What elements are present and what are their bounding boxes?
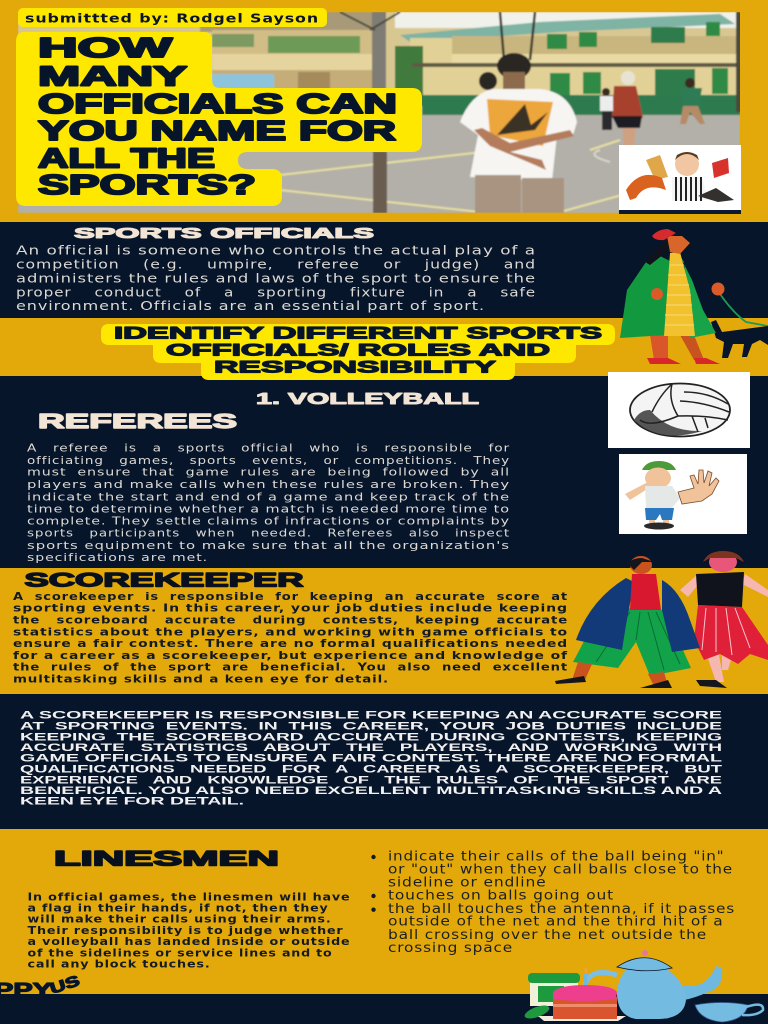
teapot handle <box>585 973 617 985</box>
icon: two fashion figures <box>555 551 768 688</box>
submitted-by label <box>18 8 327 27</box>
text block: uppercase description: ACCURATE STATISTICS ABOUT THE PLAYERS, AND WORKING WITH <box>20 742 722 754</box>
text block: referee description: players and make calls when these rules are broken. They <box>27 478 510 491</box>
text block: linesmen description: Their responsibility is to judge whether <box>28 924 343 937</box>
bullet list: when linesmen signal: touches on balls going out <box>388 889 614 904</box>
text block: linesmen description: a flag in their hands, if not, then they <box>28 901 328 914</box>
hair <box>645 237 671 265</box>
title on yellow block: ALL THE <box>38 142 215 174</box>
text block: definition of an official <box>16 244 536 313</box>
red shirt <box>630 574 661 610</box>
panel: linesmen <box>0 829 768 994</box>
title on yellow block: MANY <box>38 60 187 92</box>
text block: uppercase description: EXPERIENCE AND KNOWLEDGE OF THE RULES OF THE SPORT ARE <box>20 774 722 786</box>
leash <box>718 291 768 326</box>
legs <box>650 335 668 360</box>
shirt <box>645 486 680 508</box>
text block: definition of an official: An official is someone who controls the actual play of a <box>16 244 536 258</box>
text block: uppercase description <box>20 710 723 808</box>
text block: uppercase description: KEEN EYE FOR DETAIL. <box>20 796 244 808</box>
green trousers with pleats <box>573 608 691 676</box>
text block: scorekeeper description: A scorekeeper is responsible for keeping an accurate score at <box>13 590 568 603</box>
text block: referee description: time to determine whether a match is needed more time to <box>27 502 510 515</box>
panel: sports officials <box>0 222 768 318</box>
cropped footer lettering: US <box>48 972 82 998</box>
submitted-by label: submittted by: Rodgel Sayson <box>25 10 319 26</box>
text block: referee description: officiating games, sports events, or competitions. They <box>27 454 510 467</box>
man in white shirt, viewed from behind <box>460 53 577 213</box>
right figure legs <box>705 650 734 682</box>
text block: scorekeeper description: statistics about the players, and working with game officials to <box>13 625 568 638</box>
identify heading on yellow block <box>101 324 615 380</box>
title on yellow block: YOU NAME FOR <box>38 115 396 146</box>
heading: sports officials: SPORTS OFFICIALS <box>74 225 374 242</box>
text block: scorekeeper description: ensure a fair contest. There are no formal qualifications needed <box>13 637 568 650</box>
text block: definition of an official: administers the rules and laws of the sport to ensure the <box>16 272 536 286</box>
hero photo: volleyball court with official <box>18 12 742 213</box>
left figure ankles <box>572 662 668 686</box>
title on yellow block <box>16 32 422 206</box>
bullet list: when linesmen signal: crossing space <box>388 941 513 956</box>
heading: 1. volleyball: 1. VOLLEYBALL <box>256 391 479 408</box>
text block: linesmen description: of the sidelines or service lines and to <box>28 946 332 959</box>
text block: uppercase description: KEEPING THE SCOREBOARD ACCURATE DURING CONTESTS, KEEPING <box>20 731 722 743</box>
panel: volleyball and referees <box>0 376 768 568</box>
red card <box>712 158 729 178</box>
flag <box>626 175 666 200</box>
bullet list: when linesmen signal <box>371 850 735 956</box>
left head <box>630 556 652 574</box>
text block: definition of an official: competition (e.g. umpire, referee or judge) and <box>16 258 536 272</box>
identify heading on yellow block: IDENTIFY DIFFERENT SPORTS <box>114 324 602 342</box>
teapot lid <box>617 958 672 971</box>
right figure shoes <box>696 680 727 688</box>
title on yellow block: SPORTS? <box>38 169 256 200</box>
text block: referee description <box>27 442 510 564</box>
teacup <box>695 1002 748 1022</box>
bullet list: when linesmen signal: or "out" when they call balls close to the <box>388 863 733 878</box>
bullet list: when linesmen signal: indicate their calls of the ball being "in" <box>388 850 724 865</box>
text block: referee description: must ensure that game rules are being followed by all <box>27 466 510 479</box>
text block: uppercase description: QUALIFICATIONS NEEDED FOR A CAREER AS A SCOREKEEPER, BUT <box>20 764 723 776</box>
bullet list: when linesmen signal: ball crossing over the net outside the <box>388 928 707 943</box>
green leaf <box>523 1003 551 1021</box>
text block: linesmen description <box>28 890 351 970</box>
shoes <box>647 358 681 364</box>
text block: definition of an official: environment. Officials are an essential part of sport. <box>16 299 485 313</box>
icon: woman walking a dog <box>620 229 768 364</box>
text block: scorekeeper description: sporting events. In this career, your job duties include keeping <box>13 602 568 615</box>
bullet list: when linesmen signal: sideline or endline <box>388 876 546 891</box>
background player in red vest <box>612 71 643 146</box>
hands <box>651 288 663 300</box>
striped shirt <box>672 177 708 201</box>
text block: uppercase description: A SCOREKEEPER IS RESPONSIBLE FOR KEEPING AN ACCURATE SCORE <box>20 710 722 722</box>
black top <box>696 572 744 607</box>
icon: volleyball photo <box>608 372 750 448</box>
icon: tea set and cake <box>523 950 763 1022</box>
yellow dress with stripes <box>664 252 695 336</box>
face <box>667 236 690 254</box>
text block: uppercase description: GAME OFFICIALS TO ENSURE A FAIR CONTEST. THERE ARE NO FORMAL <box>20 753 723 765</box>
heading: referees: REFEREES <box>38 410 237 433</box>
right figure arms <box>680 574 768 597</box>
text block: scorekeeper description: multitasking skills and a keen eye for detail. <box>13 673 389 686</box>
left figure shoes <box>555 676 672 688</box>
bullet list: when linesmen signal: the ball touches the antenna, if it passes <box>388 902 735 917</box>
shorts <box>645 508 674 520</box>
green jar <box>530 976 578 1006</box>
text block: referee description: indicate the start and end of a game and keep track of the <box>27 490 510 503</box>
title on yellow block: HOW <box>38 32 172 63</box>
panel: gold band <box>0 318 768 376</box>
text block: definition of an official: proper conduct of a sporting fixture in a safe <box>16 285 536 299</box>
legs and shoes <box>649 520 669 526</box>
icon: referee blowing whistle <box>619 454 747 534</box>
text block: linesmen description: a volleyball has landed inside or outside <box>28 935 350 948</box>
text block: uppercase description: AT SPORTING EVENTS. IN THIS CAREER, YOUR JOB DUTIES INCLUDE <box>20 720 722 732</box>
panel: all-caps scorekeeper text <box>0 694 768 829</box>
bullet list: when linesmen signal: outside of the net and the third hit of a <box>388 915 724 930</box>
dog <box>711 320 768 358</box>
cake <box>553 997 617 1019</box>
text block: scorekeeper description: the rules of the sport are beneficial. You also need excellent <box>13 661 568 674</box>
cropped footer lettering <box>0 976 80 994</box>
text block: linesmen description: will make their calls using their arms. <box>28 913 332 926</box>
blue coat <box>576 578 700 652</box>
heading: linesmen: LINESMEN <box>54 847 279 871</box>
whistle <box>698 188 734 202</box>
heading: scorekeeper: SCOREKEEPER <box>24 571 304 592</box>
candle <box>584 973 588 985</box>
text block: referee description: sports participants when needed. Referees also inspect <box>27 527 510 540</box>
identify heading on yellow block: RESPONSIBILITY <box>214 358 496 377</box>
text block: linesmen description: call any block touches. <box>28 957 210 970</box>
green coat <box>620 256 672 338</box>
text block: uppercase description: BENEFICIAL. YOU ALSO NEED EXCELLENT MULTITASKING SKILLS AND A <box>20 785 722 797</box>
text block: scorekeeper description: for a career as a scorekeeper, but experience and knowledge of <box>13 649 568 662</box>
identify heading on yellow block: OFFICIALS/ ROLES AND <box>166 340 550 360</box>
text block: referee description: A referee is a sports official who is responsible for <box>27 442 510 455</box>
background player in green shirt <box>479 72 705 130</box>
teapot body <box>617 962 686 1019</box>
text block: referee description: sports equipment to make sure that all the organization's <box>27 539 510 552</box>
text block: referee description: specifications are met. <box>27 551 208 564</box>
red hat <box>652 229 676 240</box>
text block: linesmen description: In official games, the linesmen will have <box>28 890 351 903</box>
plate <box>538 1016 626 1021</box>
green cap <box>642 461 676 470</box>
head <box>675 152 699 176</box>
text block: scorekeeper description: the scoreboard accurate during contests, keeping accurate <box>13 613 568 626</box>
yellow card <box>646 155 668 180</box>
panel: scorekeeper <box>0 568 768 694</box>
left arm <box>625 482 652 500</box>
text block: referee description: complete. They settle claims of infractions or complaints by <box>27 514 510 527</box>
footer band <box>0 994 768 1024</box>
text block: scorekeeper description <box>13 590 568 686</box>
face <box>645 468 671 488</box>
title on yellow block: OFFICIALS CAN <box>38 88 397 119</box>
red skirt with pleats <box>694 605 768 664</box>
raised hand <box>678 470 719 504</box>
teapot spout <box>684 966 722 1000</box>
right head <box>709 552 737 572</box>
cake icing <box>553 985 617 1001</box>
referee cartoon inset <box>619 145 741 214</box>
